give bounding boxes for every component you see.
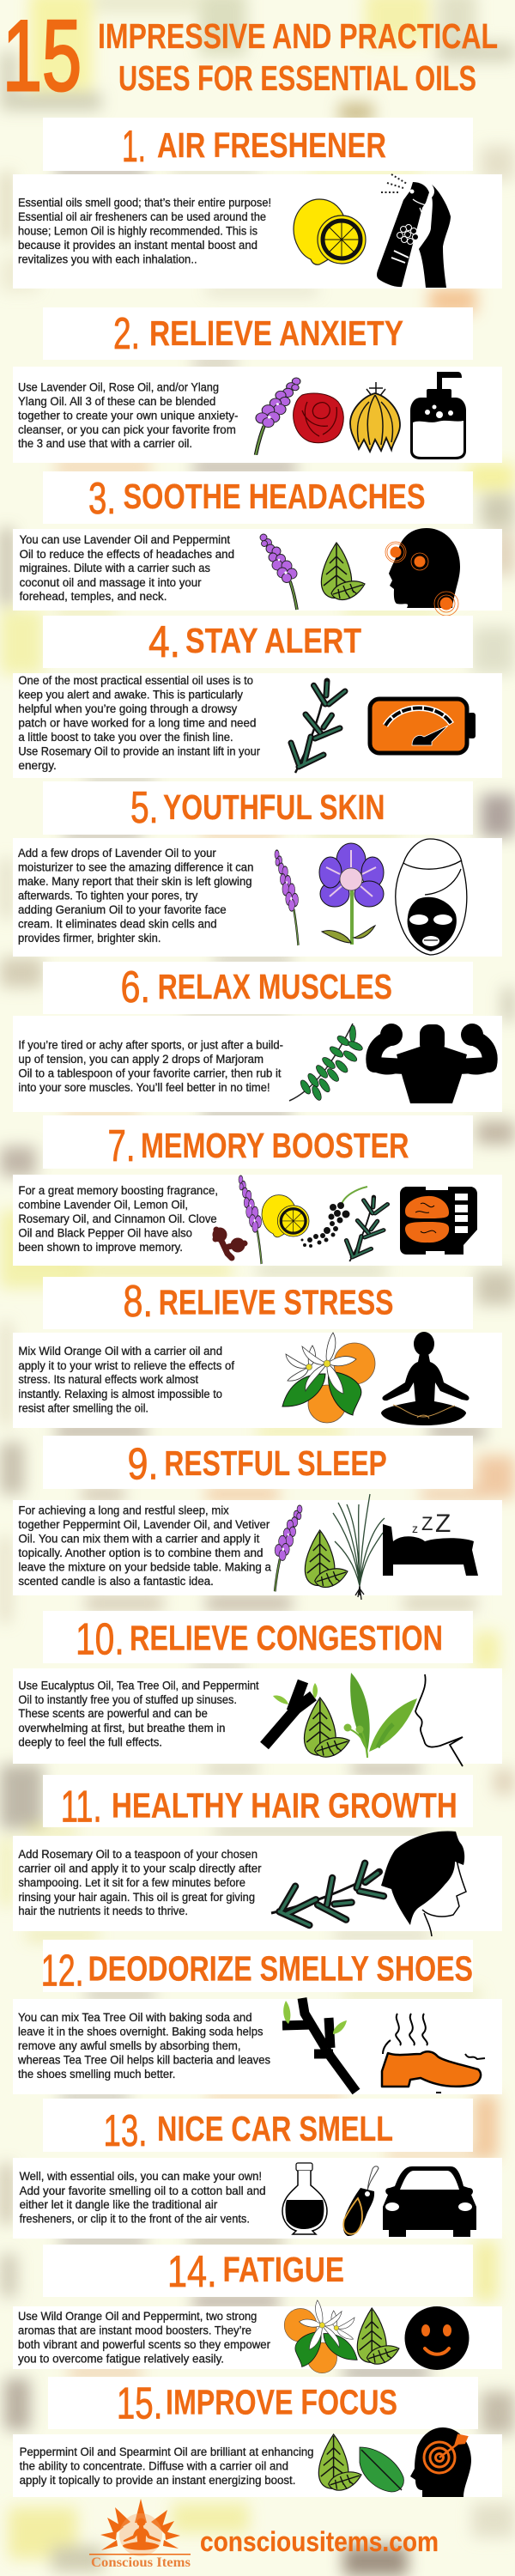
heading: 7. Memory Booster [43,1115,473,1171]
heading: 6. Relax Muscles [43,962,473,1014]
panel: improve focus [13,2427,502,2497]
text block: One of the most practical essential oil uses is to [18,674,253,687]
icon: lemon [262,1195,309,1237]
title text [98,16,498,98]
heading: 8. Relieve Stress: RELIEVE STRESS [159,1283,394,1322]
icon: smelly shoe [382,2014,485,2093]
heading: 12. Deodorize Smelly Shoes [41,1940,473,1996]
icon: smiley face [405,2306,469,2370]
text block: remove any awful smells by absorbing them, [18,2039,240,2052]
heading: 6. Relax Muscles: 6. [120,963,150,1012]
text block: rinsing your hair again. This oil is great for giving [18,1891,255,1904]
text block: been shown to improve memory. [18,1241,183,1254]
text block: a little boost to take you over the finish line. [18,731,233,744]
heading: 9. Restful Sleep: RESTFUL SLEEP [164,1443,387,1483]
panel: relieve stress [13,1332,502,1428]
text block [18,1504,271,1588]
text block: provides firmer, brighter skin. [18,932,161,945]
text block: Well, with essential oils, you can make your own! [20,2170,262,2183]
text block: If you’re tired or achy after sports, or just after a build- [18,1039,283,1051]
icon: cloves [213,1228,245,1258]
text block: you to overcome fatigue relatively easily. [18,2353,224,2365]
text block: Peppermint Oil and Spearmint Oil are brilliant at enhancing [20,2445,313,2458]
text block: Add a few drops of Lavender Oil to your [18,847,216,860]
text block: Oil and Black Pepper Oil have also [18,1226,192,1240]
text block: resist after smelling the oil. [18,1401,148,1415]
panel: restful sleep [13,1494,502,1600]
icon: rose [294,393,343,443]
text block: revitalizes you with each inhalation.. [18,252,197,265]
icon: spearmint leaf [360,2447,403,2492]
icon: ylang ylang flower [350,382,400,452]
text block: leave it in the shoes overnight. Baking soda helps [18,2025,264,2038]
icon: rosemary [347,1197,387,1261]
heading: 5. Youthful Skin: 5. [130,783,158,833]
icon: meditating person [381,1332,470,1425]
title numeral 15: 15 [3,0,82,112]
text block: keep you alert and awake. This is particularly [18,689,243,701]
heading: 3. Soothe Headaches: 3. [88,474,116,524]
text block: patch or have worked for a long time and need [18,716,257,730]
text block: either let it dangle like the traditional air [20,2198,218,2211]
panel: deodorize smelly shoes [13,1998,502,2094]
heading: 15. Improve Focus: 15. [117,2379,162,2428]
text block [20,2445,313,2487]
text block: both vibrant and powerful scents so they empower [18,2338,270,2351]
icon: geranium flower [319,843,384,945]
icon: head with hair [381,1831,466,1936]
text block [18,1345,234,1415]
panel: soothe headaches [13,528,502,616]
heading: 14. Fatigue: FATIGUE [223,2250,344,2289]
icon: peppermint leaf [318,2434,361,2490]
icon: tea tree branch [282,1998,356,2092]
text block: Oil to a tablespoon of your favorite carrier, then rub it [18,1066,282,1080]
heading: 2. Relieve Anxiety [43,307,473,360]
text block: Mix Wild Orange Oil with a carrier oil and [18,1345,222,1358]
text block: overwhelming at first, but breathe them in [18,1722,226,1735]
heading: 4. Stay Alert [43,616,473,668]
text block [18,847,253,945]
text block: coconut oil and massage it into your [20,576,202,589]
logo meditating figure [123,2518,161,2550]
heading: 15. Improve Focus [48,2377,478,2429]
text block: cleanser, or you can pick your favorite from [18,423,236,436]
text block: together to create your own unique anxiety- [18,409,239,422]
text block: combine Lavender Oil, Lemon Oil, [18,1199,188,1211]
icon: lavender [256,378,300,455]
heading: 10. Relieve Congestion: 10. [76,1614,124,1664]
text block: Oil to instantly free you of stuffed up sinuses. [18,1693,237,1706]
icon: head with pain points [385,528,460,616]
text block [17,2011,270,2081]
icon: bed with person sleeping [383,1510,478,1576]
icon: rosemary [268,1839,393,1959]
icon: lemon [294,199,366,264]
text block: the ability to concentrate. Diffuse with a carrier oil and [20,2459,288,2473]
icon: oil bottle [282,2163,327,2234]
heading: 2. Relieve Anxiety: 2. [113,309,140,359]
heading: 1. Air Freshener [43,118,473,172]
text block: Ylang Oil. All 3 of these can be blended [18,395,215,408]
text block: You can mix Tea Tree Oil with baking soda and [18,2011,252,2024]
heading: 13. Nice Car Smell: 13. [103,2106,147,2156]
text block: helpful when you’re going through a drowsy [18,702,238,715]
text block: Essential oils smell good; that’s their entire purpose! [18,196,271,210]
panel: healthy hair growth [13,1831,502,1959]
icon: peppermint leaf [357,2308,399,2364]
text block: moisturizer to see the amazing difference it can [18,860,253,874]
heading: 6. Relax Muscles: RELAX MUSCLES [158,967,392,1006]
icon: muscular torso [367,1024,496,1103]
icon: marjoram sprig [289,1024,364,1102]
icon: lavender [275,850,299,945]
text block [18,1848,262,1917]
icon: bed with person sleeping: z [412,1522,418,1535]
text block: together Peppermint Oil, Lavender Oil, and Vetiver [18,1518,270,1531]
heading: 2. Relieve Anxiety: RELIEVE ANXIETY [149,313,403,353]
text block: Use Wild Orange Oil and Peppermint, two strong [18,2310,257,2323]
text block: Essential oil air fresheners can be used around the [18,210,266,223]
panel: nice car smell [13,2158,502,2239]
heading: 4. Stay Alert: STAY ALERT [185,621,361,660]
text block: Oil to reduce the effects of headaches and [20,548,234,561]
heading: 13. Nice Car Smell [43,2099,473,2156]
icon: air freshener tag [343,2166,379,2236]
text block: hair the nutrients it needs to thrive. [18,1905,188,1917]
heading: 12. Deodorize Smelly Shoes: 12. [41,1946,84,1996]
text block: because it provides an instant mental boost and [18,239,258,252]
heading: 14. Fatigue [43,2245,473,2297]
text block [18,1039,283,1094]
icon: tea tree branch [264,1681,318,1746]
icon: car front [383,2166,476,2237]
icon: spray bottle in hand [377,174,451,288]
text block: For achieving a long and restful sleep, mix [18,1504,229,1516]
text block: adding Geranium Oil to your favorite face [18,903,227,916]
text block: forehead, temples, and neck. [20,590,167,603]
heading: 3. Soothe Headaches: SOOTHE HEADACHES [124,477,426,516]
text block: Use Lavender Oil, Rose Oil, and/or Ylang [18,381,219,393]
text block: energy. [18,759,57,772]
text block: topically. Another option is to combine them and [18,1546,264,1559]
text block: You can use Lavender Oil and Peppermint [20,533,230,546]
heading: 1. Air Freshener: 1. [122,122,146,172]
text block [18,2310,270,2365]
icon: rosemary [291,681,345,773]
heading: 4. Stay Alert: 4. [148,617,180,667]
text block: stress. Its natural effects work almost [18,1373,198,1386]
text block: house; Lemon Oil is highly recommended. This is [18,224,258,237]
icon: nose profile [415,1674,463,1766]
icon: lavender [260,534,297,610]
logo name: Conscious Items [91,2555,191,2570]
text block: make. Many report that their skin is left glowing [18,875,252,888]
panel: youthful skin [13,838,502,957]
icon: brain memory card [400,1187,477,1255]
heading: 13. Nice Car Smell: NICE CAR SMELL [157,2109,393,2148]
icon: vetiver grass [333,1494,385,1600]
heading: 10. Relieve Congestion [43,1611,473,1664]
text block: apply it topically to provide an instant energizing boost. [20,2474,295,2487]
heading: 8. Relieve Stress: 8. [124,1277,153,1327]
text block: afterwards. To tighten your pores, try [18,890,198,902]
heading: 1. Air Freshener: AIR FRESHENER [157,125,386,165]
text block [20,533,234,603]
heading: 5. Youthful Skin: YOUTHFUL SKIN [163,787,385,827]
text block: Add your favorite smelling oil to a cotton ball and [20,2184,266,2197]
text block: scented candle is also a fantastic idea. [18,1575,214,1588]
icon: black pepper [300,1187,367,1248]
text block: whereas Tea Tree Oil helps kill bacteria and leaves [17,2054,270,2066]
heading: 7. Memory Booster: MEMORY BOOSTER [141,1126,409,1165]
text block: aromas that are instant mood boosters. They’re [18,2324,251,2337]
heading: 11. Healthy Hair Growth [43,1775,473,1832]
text block: For a great memory boosting fragrance, [18,1184,218,1197]
heading: 11. Healthy Hair Growth: 11. [61,1783,102,1832]
text block: Rosemary Oil, and Cinnamon Oil. Clove [18,1212,217,1225]
text block: shampooing. Let it sit for a few minutes before [18,1876,245,1889]
icon: eucalyptus [343,1673,417,1758]
heading: 8. Relieve Stress [43,1277,473,1329]
text block: These scents are powerful and can be [18,1707,208,1720]
heading: 15. Improve Focus: IMPROVE FOCUS [166,2382,397,2421]
icon: peppermint leaf [304,1698,349,1757]
heading: 5. Youthful Skin [43,781,473,835]
text block: migraines. Dilute with a carrier such as [20,562,210,574]
heading: 7. Memory Booster: 7. [108,1121,136,1171]
text block: Oil. You can mix them with a carrier and apply it [18,1532,260,1546]
icon: lavender [239,1176,262,1264]
text block: Add Rosemary Oil to a teaspoon of your chosen [18,1848,258,1861]
text block [18,1680,259,1748]
logo sun rays [100,2499,180,2556]
heading: 9. Restful Sleep: 9. [127,1439,158,1489]
text block: deeply to feel the full effects. [18,1736,162,1748]
panel: fatigue [13,2300,502,2373]
icon: orange blossom [282,1333,375,1423]
heading: 14. Fatigue: 14. [167,2247,217,2297]
text block: into your sore muscles. You’ll feel better in no time! [18,1081,270,1094]
text block: Use Eucalyptus Oil, Tea Tree Oil, and Peppermint [18,1680,259,1692]
panel: relieve anxiety [13,367,502,463]
heading: 3. Soothe Headaches [43,471,473,524]
heading: 10. Relieve Congestion: RELIEVE CONGESTION [130,1618,443,1657]
text block [18,674,260,772]
text block: the shoes smelling much better. [18,2068,175,2081]
panel: relax muscles [13,1016,502,1112]
panel: relieve congestion [13,1668,502,1766]
icon: bed with person sleeping: Z [435,1510,451,1538]
text block: up of tension, you can apply 2 drops of Marjoram [18,1053,264,1066]
text block: the 3 and use that with a carrier oil. [18,437,192,450]
text block: carrier oil and apply it to your scalp directly after [18,1862,262,1875]
heading: 9. Restful Sleep [43,1436,473,1489]
text block: apply it to your wrist to relieve the effects of [18,1359,234,1372]
icon: head with target [410,2427,471,2497]
logo: Conscious Items [89,2499,191,2570]
logo rule [89,2554,191,2555]
title [3,0,498,112]
website address: consciousitems.com [200,2526,439,2557]
text block [20,2170,266,2226]
text block: leave the mixture on your bedside table. Making a [18,1561,271,1573]
panel: stay alert [13,673,502,778]
icon: orange blossom [284,2300,357,2373]
text block: fresheners, or clip it to the front of the air vents. [20,2212,250,2226]
icon: peppermint leaf [321,543,365,600]
text block [18,196,271,265]
icon: soap pump bottle [410,372,466,459]
text block: instantly. Relaxing is almost impossible to [18,1388,222,1400]
text block [18,1184,218,1254]
icon: lavender [275,1505,302,1591]
text block [18,381,239,450]
icon: battery gauge [370,699,476,753]
text block: Use Rosemary Oil to provide an instant lift in your [18,745,260,757]
icon: peppermint leaf [305,1530,348,1588]
panel: air freshener [13,174,502,289]
icon: bed with person sleeping: Z [421,1513,433,1534]
icon: face mask with towel [396,839,467,955]
text block: cream. It eliminates dead skin cells and [18,917,217,931]
panel: memory booster [13,1175,502,1266]
